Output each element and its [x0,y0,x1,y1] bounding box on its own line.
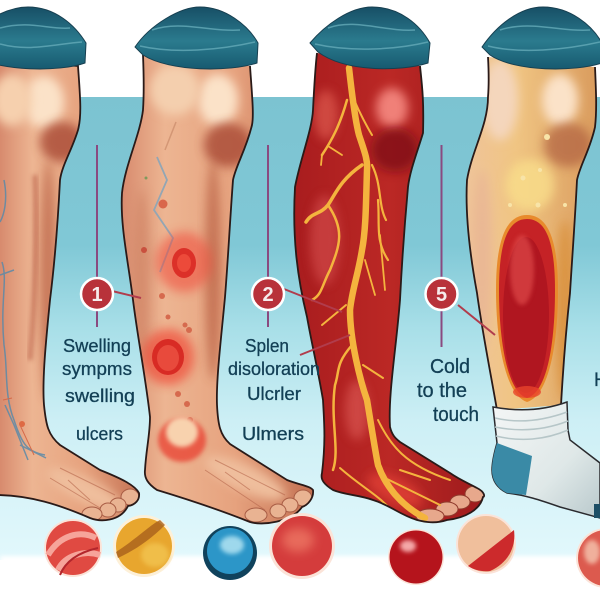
callout: badge 5: 5 [436,284,447,306]
text block: column 2: disoloration [228,358,320,379]
icon: swatch red skin [269,513,335,579]
panel: leg 4 with sock [460,50,600,518]
icon: swatch red ball [388,529,444,585]
panel: leg 1 [0,55,145,525]
caps [0,7,600,69]
text block: column 1 [62,335,135,444]
text block: column 2 [228,335,320,444]
knee highlight [24,76,64,128]
toes [416,486,485,523]
text block: column 1: swelling [65,385,135,406]
callout: badge 2 [252,278,350,355]
sores [156,232,212,292]
cap folds [0,24,600,50]
knee highlight [198,74,238,126]
text block: column 3: to the [417,379,467,402]
veins [0,180,46,460]
cap 4 [482,7,600,69]
callout: badge 2: 2 [262,284,274,306]
callout: badge 5 [426,278,495,335]
panel: leg 2 [115,50,315,530]
callout: badge 1: 1 [91,284,103,306]
icon: swatch orange [113,515,175,577]
callout: badge 1 [81,278,141,310]
icon: swatch blue [203,526,257,580]
ankle bone [158,418,206,462]
cap 1 [0,7,86,69]
text block: column 1: Swelling [63,335,131,356]
guide lines [97,145,442,347]
text block: column 3: Cold [430,355,470,378]
text block: column 2: Ulmers [242,423,304,444]
nerve branches [306,68,450,518]
toes [245,490,312,522]
knee highlight [376,88,408,128]
vein [154,157,173,272]
text block: column 2: Splen [245,335,289,356]
icon: swatch red cropped [576,528,600,588]
icon: swatch red tissue [44,519,102,577]
panel: leg 3 [290,50,490,530]
text block: column 1: sympms [62,358,132,379]
text block: column 1: ulcers [76,423,123,444]
text block: column 2: Ulcrler [247,383,301,404]
text block: column 3: touch [433,403,479,426]
ulcer [496,215,558,402]
cap 2 [135,7,258,69]
icon: swatch pale skin with wound [456,514,516,574]
text block: column 3 [417,355,479,426]
sock [492,402,600,518]
cap 3 [310,7,430,69]
toes [82,489,139,521]
